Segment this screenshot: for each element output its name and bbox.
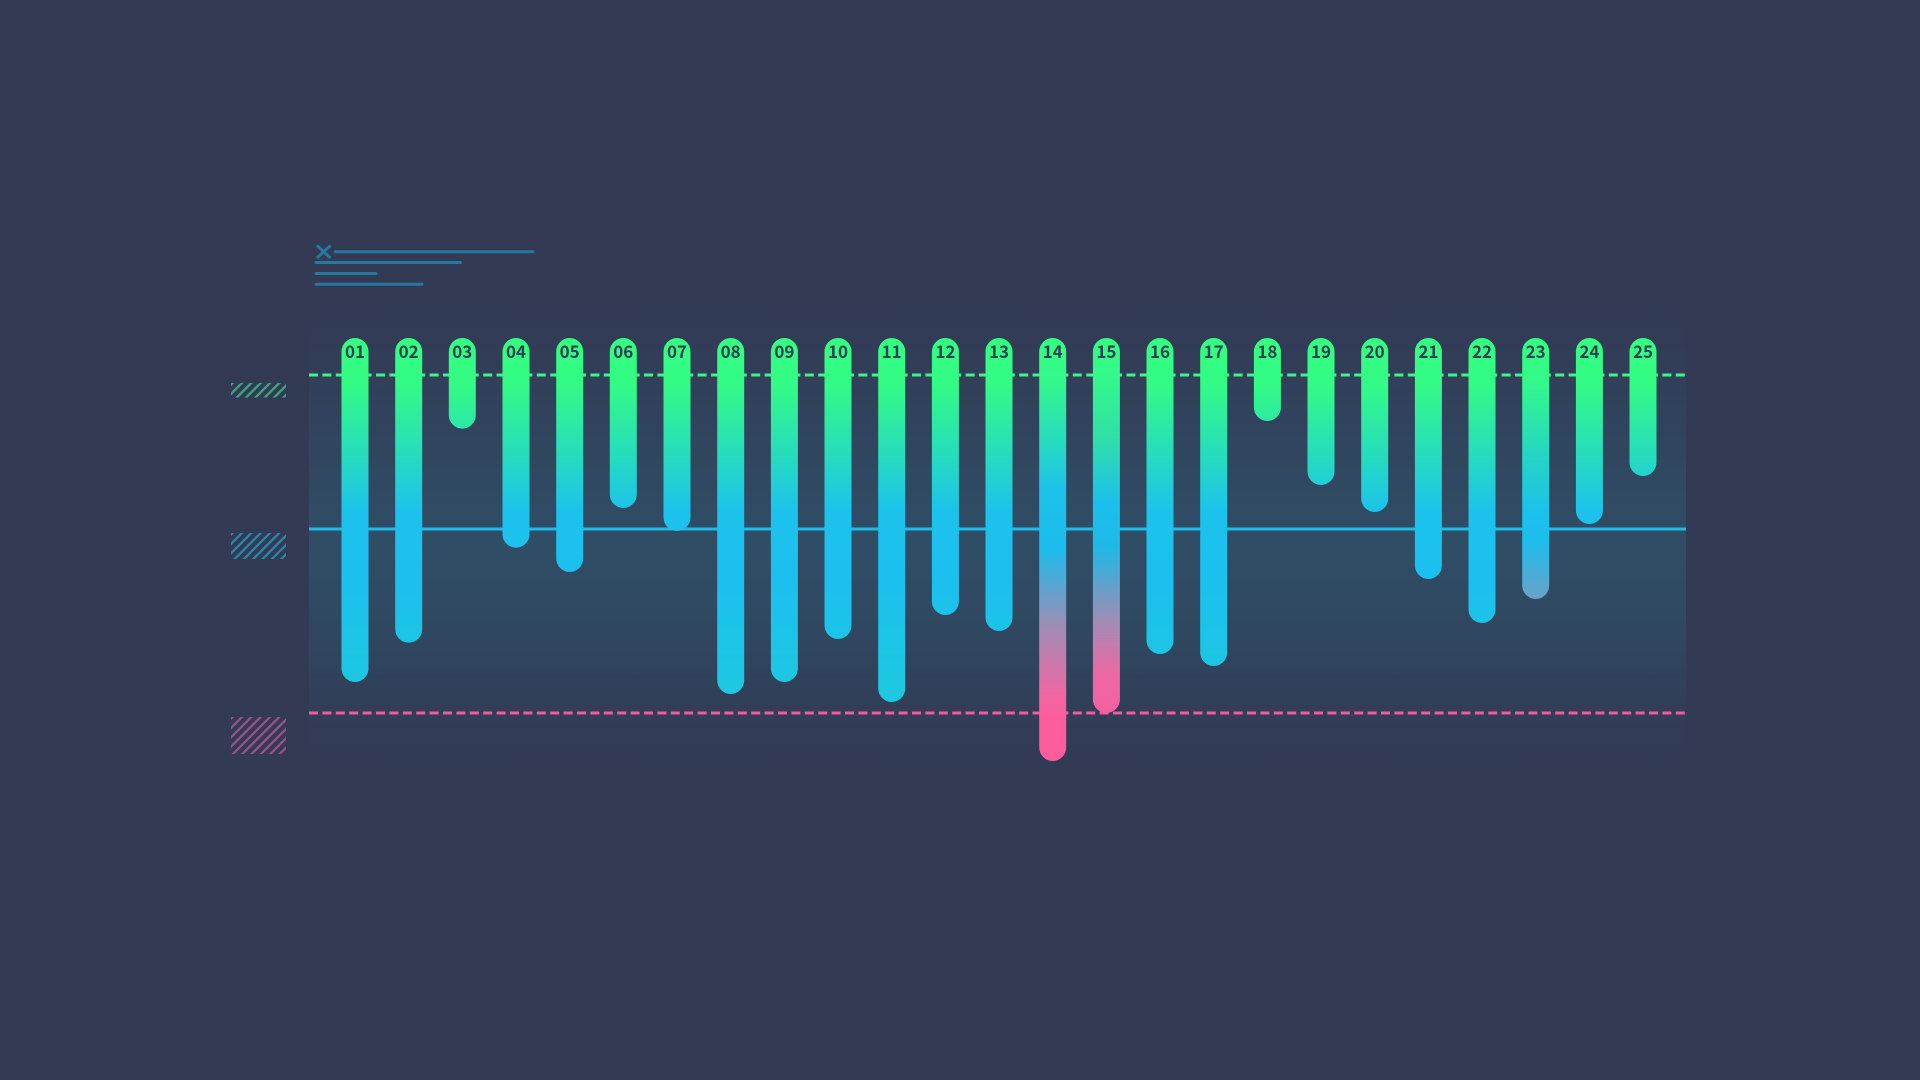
mean line: blue <box>309 528 1686 530</box>
bar 15 <box>1093 338 1120 713</box>
bar 23 <box>1522 338 1549 599</box>
bar 04: 04 <box>506 338 526 363</box>
bar 03: 03 <box>452 338 472 363</box>
legend swatch: blue band <box>231 533 286 559</box>
bar 19: 19 <box>1311 338 1331 363</box>
upper threshold line: green dashed <box>309 374 1686 376</box>
bar 12 <box>932 338 959 615</box>
bar 13 <box>986 338 1012 631</box>
bar 18: 18 <box>1257 338 1277 363</box>
bar 25: 25 <box>1633 338 1653 363</box>
bar 17: 17 <box>1204 338 1224 363</box>
bar 20: 20 <box>1365 338 1385 363</box>
bar 10 <box>824 338 852 639</box>
bar 11 <box>878 338 905 702</box>
bar 13: 13 <box>989 338 1009 363</box>
bar 12: 12 <box>935 338 955 363</box>
bar 24 <box>1576 338 1603 524</box>
bar 14: 14 <box>1043 338 1063 363</box>
bar 18 <box>1254 338 1281 421</box>
bar 06: 06 <box>613 338 633 363</box>
bar 09: 09 <box>774 338 794 363</box>
bar 14 <box>1039 338 1066 761</box>
bar 21 <box>1415 338 1442 579</box>
bar 02 <box>395 338 422 643</box>
bar 07: 07 <box>667 338 687 363</box>
bar 20 <box>1361 338 1388 512</box>
bar chart: 25 hanging bars <box>342 338 1656 761</box>
bar 08 <box>717 338 744 694</box>
bar 04 <box>502 338 530 548</box>
bar 03 <box>449 338 476 429</box>
bar 16 <box>1146 338 1174 654</box>
lower threshold line: pink dashed <box>309 712 1686 714</box>
legend swatch: pink band <box>231 717 286 754</box>
bar 01 <box>342 338 368 682</box>
bar 09 <box>771 338 798 682</box>
bar 17 <box>1200 338 1227 666</box>
legend swatch: green band <box>231 383 286 398</box>
bar 01: 01 <box>345 338 365 363</box>
bar 16: 16 <box>1150 338 1170 363</box>
bar 25 <box>1630 338 1656 476</box>
bar 24: 24 <box>1579 338 1599 363</box>
bar 19 <box>1308 338 1334 485</box>
bar 10: 10 <box>828 338 848 363</box>
bar 15: 15 <box>1096 338 1116 363</box>
bar 02: 02 <box>399 338 419 363</box>
bar 06 <box>610 338 637 508</box>
panel: chart background <box>309 295 1686 785</box>
bar 23: 23 <box>1526 338 1546 363</box>
bar 11: 11 <box>882 338 902 363</box>
bar 05 <box>556 338 583 572</box>
bar 05: 05 <box>560 338 580 363</box>
bar 22: 22 <box>1472 338 1492 363</box>
bar 22 <box>1468 338 1496 623</box>
bar 07 <box>664 338 690 531</box>
bar 21: 21 <box>1418 338 1438 363</box>
icon and legend text lines <box>316 246 533 284</box>
bar 08: 08 <box>721 338 741 363</box>
